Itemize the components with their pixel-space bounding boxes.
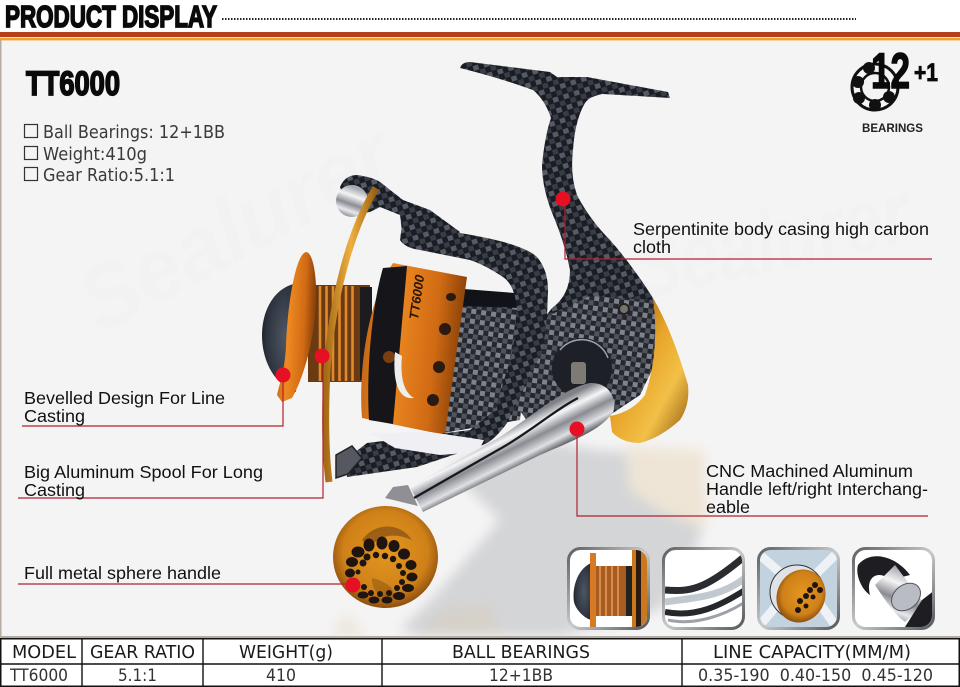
table header row: BALL BEARINGS xyxy=(452,642,590,663)
reel: orange rotor cup: TT6000 xyxy=(406,273,427,320)
reel: rotor arm xyxy=(345,217,548,477)
model title: TT6000 xyxy=(26,65,120,103)
fishing reel xyxy=(262,62,688,608)
bearings badge xyxy=(852,43,938,135)
callout: aluminum spool xyxy=(18,348,330,500)
thumbnail: line roller xyxy=(854,548,935,628)
table value row: 5.1:1 xyxy=(118,666,157,686)
section heading: PRODUCT DISPLAY xyxy=(5,0,217,34)
reel: orange flange xyxy=(277,252,316,402)
reel: upper bail arm xyxy=(340,175,460,250)
thumbnail: crank arm xyxy=(664,548,745,628)
reel: gear cover xyxy=(552,304,629,398)
reel: spool winding xyxy=(308,285,372,382)
reel: gold body cap xyxy=(610,298,688,443)
table value row: TT6000 xyxy=(9,666,68,686)
callout: CNC handle: eable xyxy=(706,497,750,517)
reel: silver line roller xyxy=(336,185,368,217)
reel: lower body casing xyxy=(516,296,664,425)
thumbnail: spool xyxy=(568,548,648,628)
table value row xyxy=(9,666,933,686)
callout: body casing: cloth xyxy=(633,237,671,257)
reel: white arm highlight xyxy=(370,432,484,455)
watermark xyxy=(62,103,922,353)
header dotted rule xyxy=(222,18,856,20)
reel: sphere handle xyxy=(333,506,438,608)
table header row: GEAR RATIO xyxy=(90,642,195,663)
reel: bail hinge xyxy=(336,446,362,478)
spec list: Gear Ratio:5.1:1 xyxy=(43,166,175,186)
reel: gold bail wire xyxy=(326,188,376,482)
table header row xyxy=(12,642,911,663)
bearings badge: 12 xyxy=(871,43,910,99)
reel: crank collar xyxy=(385,485,418,506)
callout: bevelled design xyxy=(22,368,290,426)
table value row: 12+1BB xyxy=(489,666,553,686)
watermark: Sealurer xyxy=(62,103,414,353)
callout: sphere handle xyxy=(18,563,360,592)
table value row: 0.35-190 0.40-150 0.45-120 xyxy=(698,666,933,686)
reel: spool front dome xyxy=(262,283,300,392)
reel reflection xyxy=(330,443,708,636)
spec list: Weight:410g xyxy=(43,145,147,165)
thumbnail: sphere knob xyxy=(758,548,838,631)
bearings badge: +1 xyxy=(914,59,938,87)
bearings badge: BEARINGS xyxy=(862,123,923,135)
reel: orange rotor cup xyxy=(361,263,467,435)
spec list xyxy=(24,123,225,186)
table header row: LINE CAPACITY(MM/M) xyxy=(713,642,911,663)
callout: bevelled design: Casting xyxy=(24,406,85,426)
header colour band xyxy=(0,32,960,40)
callout: CNC handle xyxy=(570,422,928,517)
reel: carbon cylinder xyxy=(443,290,530,433)
callout: CNC handle: CNC Machined Aluminum xyxy=(706,461,913,481)
callout: aluminum spool: Big Aluminum Spool For Long xyxy=(24,462,263,482)
callout: body casing xyxy=(556,192,932,259)
callout: bevelled design: Bevelled Design For Line xyxy=(24,388,225,408)
reel: foot and stem xyxy=(460,62,670,405)
specification table xyxy=(0,638,960,687)
table header row: MODEL xyxy=(12,642,76,663)
callout: aluminum spool: Casting xyxy=(24,480,85,500)
reel: silver crank arm xyxy=(410,383,614,512)
callout: CNC handle: Handle left/right Interchang- xyxy=(706,479,928,499)
callout: sphere handle: Full metal sphere handle xyxy=(24,563,221,583)
spec list: Ball Bearings: 12+1BB xyxy=(43,123,225,143)
table header row: WEIGHT(g) xyxy=(239,642,333,663)
callout: body casing: Serpentinite body casing high carbon xyxy=(633,219,929,239)
table value row: 410 xyxy=(266,666,296,686)
